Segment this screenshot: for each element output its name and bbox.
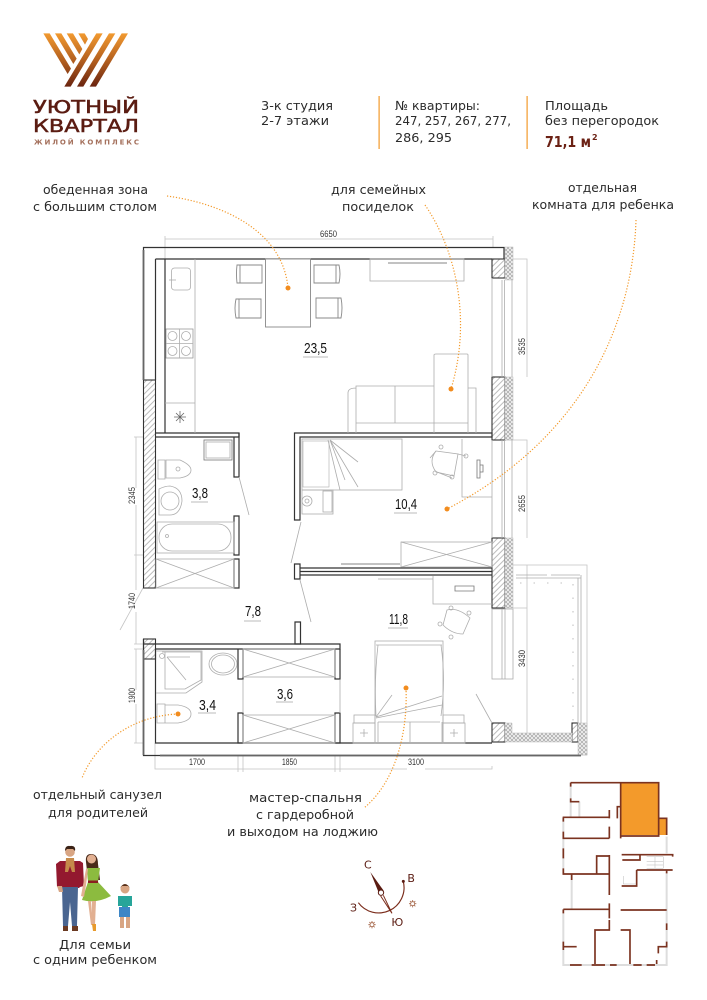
child room nightstand [302, 490, 333, 514]
area: master bedroom [388, 612, 408, 628]
man [56, 846, 84, 931]
room area labels [191, 341, 417, 714]
dimension labels: 1850 [282, 757, 297, 767]
callout: child room: отдельная [568, 180, 637, 195]
header: apartment numbers: № квартиры: [395, 98, 480, 113]
header: apartment type: 3-к студия [261, 98, 333, 113]
floor plan [120, 229, 587, 772]
compass: Ю [391, 916, 403, 929]
key plan of the floor [563, 783, 673, 965]
family illustration [33, 846, 157, 967]
callout: child room [444, 180, 674, 512]
callout: master bedroom [227, 686, 408, 839]
family illustration: с одним ребенком [33, 952, 157, 967]
child room desk and chair [430, 439, 492, 497]
dimension labels: 3430 [517, 650, 527, 667]
logo name line 1: УЮТНЫЙ [33, 96, 139, 118]
header: apartment numbers: 247, 257, 267, 277, [395, 113, 511, 128]
dimension labels: 1740 [127, 593, 137, 609]
bathroom wardrobe [156, 559, 234, 588]
dimension lines [120, 236, 527, 772]
child [118, 884, 132, 928]
callout: family area [331, 182, 461, 392]
logo name line 2: КВАРТАЛ [33, 117, 139, 137]
callout: master bedroom: мастер-спальня [249, 790, 362, 805]
header: apartment numbers: 286, 295 [395, 130, 452, 145]
logo: Уютный квартал [33, 33, 139, 146]
compass: С [364, 859, 372, 872]
kitchen counter and appliances [165, 259, 195, 433]
dimension labels: 2655 [517, 495, 527, 512]
parents bathroom fixtures [156, 651, 237, 723]
compass [350, 859, 416, 929]
logo subtitle: ЖИЛОЙ КОМПЛЕКС [34, 138, 139, 146]
header: total area: 71,1 м [545, 133, 591, 151]
dimension labels: 6650 [320, 229, 337, 239]
door swings [239, 477, 492, 723]
callout: master bedroom: и выходом на лоджию [227, 824, 378, 839]
dimension labels [127, 229, 527, 767]
area: living room: 23,5 [304, 341, 327, 357]
area: master bedroom: 11,8 [389, 612, 408, 628]
master bed [375, 641, 444, 743]
child room wardrobe [341, 542, 492, 567]
callout: parents bathroom: отдельный санузел [33, 787, 162, 802]
dimension labels: 2345 [127, 487, 137, 504]
callout: dining zone [33, 182, 290, 290]
dining table with chairs [235, 259, 342, 327]
windows [492, 278, 581, 723]
child room bed [302, 439, 402, 490]
compass: З [350, 902, 357, 915]
nightstands [353, 715, 465, 743]
area: child room: 10,4 [395, 497, 417, 513]
callout: parents bathroom: для родителей [48, 805, 148, 820]
callout: child room: комната для ребенка [532, 197, 674, 212]
sofa [348, 354, 476, 433]
icon: logo mark [43, 33, 128, 87]
highlighted apartment [621, 783, 667, 835]
TV unit [370, 259, 464, 281]
header: total area [526, 96, 659, 151]
insulation layer [505, 247, 587, 755]
area: closet: 3,6 [277, 687, 293, 703]
bathroom fixtures [157, 440, 234, 553]
callout: family area: для семейных [331, 182, 426, 197]
header: apartment type: 2-7 этажи [261, 113, 329, 128]
dimension labels: 3100 [408, 757, 424, 767]
callout: master bedroom: с гардеробной [256, 807, 354, 822]
wardrobes in walk-in closet [243, 649, 335, 743]
dimension labels: 1700 [189, 757, 205, 767]
master bedroom desk and chair [378, 576, 492, 639]
header: total area: 2 [592, 133, 598, 142]
key plan stairs [623, 857, 663, 884]
area: bathroom: 3,8 [192, 486, 208, 502]
callout: dining zone: с большим столом [33, 199, 157, 214]
callout: family area: посиделок [342, 199, 414, 214]
callout: parents bathroom [33, 712, 180, 820]
area: parents bathroom: 3,4 [199, 698, 216, 714]
header: total area: без перегородок [545, 113, 659, 128]
key plan outline [563, 783, 667, 965]
walls [144, 248, 581, 756]
woman [81, 854, 111, 931]
header: total area: Площадь [545, 98, 608, 113]
family caption: Для семьи [59, 937, 131, 952]
hatched structural columns [144, 259, 578, 742]
header: apartment numbers [378, 96, 511, 149]
header: apartment type [261, 98, 333, 128]
dimension labels: 3535 [517, 338, 527, 355]
balcony outline [505, 565, 587, 755]
callout: dining zone: обеденная зона [43, 182, 148, 197]
compass: В [407, 872, 415, 885]
dimension labels: 1900 [127, 688, 137, 703]
area: hall: 7,8 [245, 604, 261, 620]
key plan walls [563, 783, 673, 965]
